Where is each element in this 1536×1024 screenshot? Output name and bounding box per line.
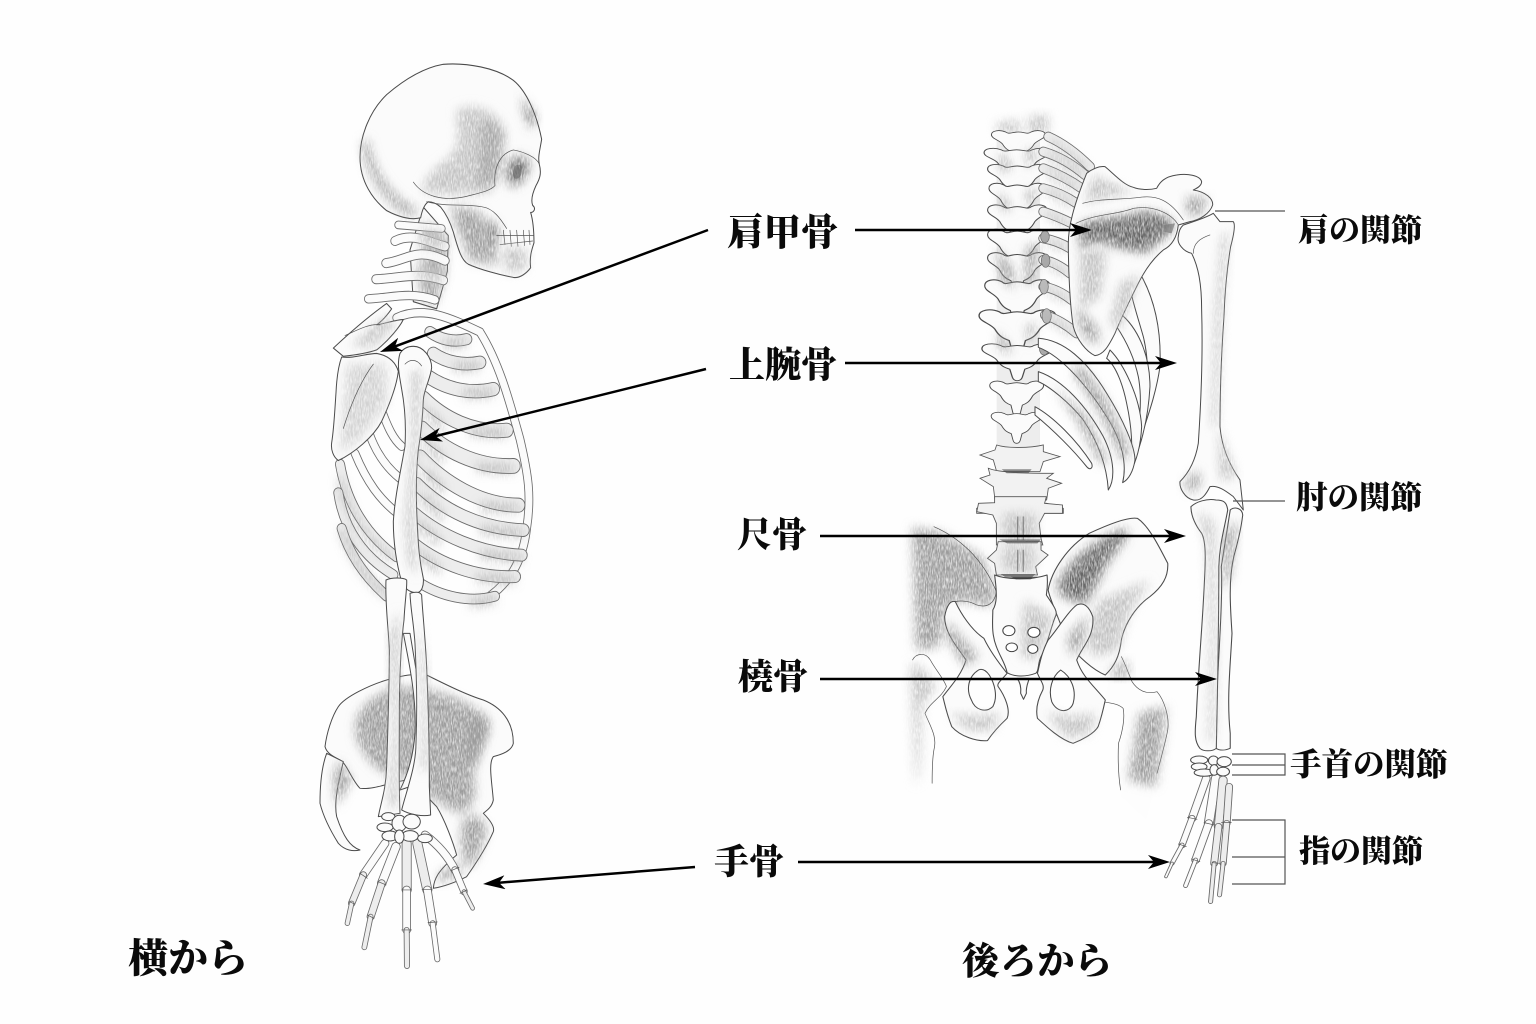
wrist joint bracket bbox=[1232, 754, 1285, 775]
forearm bones bbox=[378, 578, 431, 817]
arrow: hand, side view bbox=[499, 867, 695, 883]
pelvis bbox=[320, 674, 513, 888]
lumbar vertebrae bbox=[977, 497, 1062, 579]
arrow: radius bbox=[820, 678, 1201, 680]
pelvis, forearm and hand bbox=[911, 497, 1243, 902]
arrow: scapula, side view bbox=[395, 230, 708, 346]
label: ulna: 尺骨 bbox=[737, 516, 807, 555]
illustration: skeleton from the back bbox=[911, 115, 1243, 902]
label: shoulder joint: 肩の関節 bbox=[1298, 213, 1422, 248]
label: elbow joint: 肘の関節 bbox=[1296, 480, 1422, 515]
shoulder leader line bbox=[1215, 210, 1285, 212]
neck vertebrae bbox=[368, 207, 448, 309]
label: humerus: 上腕骨 bbox=[729, 345, 837, 385]
spine, ribs, scapula and humerus bbox=[977, 115, 1243, 513]
left hip socket ring bbox=[943, 601, 1008, 741]
right hip socket ring bbox=[1037, 604, 1128, 743]
arrow: hand, back view bbox=[798, 861, 1154, 863]
arrow: scapula, back view bbox=[855, 229, 1076, 231]
caption: from the back: 後ろから bbox=[962, 941, 1112, 983]
elbow leader line bbox=[1233, 500, 1285, 502]
skull bbox=[360, 64, 542, 278]
label: radius: 橈骨 bbox=[738, 658, 808, 697]
sacrum bbox=[993, 575, 1056, 699]
arrow: humerus, side view bbox=[436, 369, 706, 436]
hand bones bbox=[347, 813, 473, 966]
finger joint bracket bbox=[1232, 820, 1285, 884]
label: wrist joint: 手首の関節 bbox=[1290, 747, 1448, 782]
arrow: ulna bbox=[820, 535, 1170, 537]
lower body: forearm, pelvis and hand bbox=[320, 578, 513, 966]
forearm bones bbox=[1191, 500, 1243, 751]
caption: from the side: 横から bbox=[128, 936, 248, 981]
upper body: skull, neck, ribs, scapula and humerus bbox=[331, 64, 542, 603]
scapula and acromion bbox=[1068, 167, 1213, 356]
wrist and hand bones bbox=[1166, 756, 1231, 902]
label: scapula: 肩甲骨 bbox=[727, 211, 838, 254]
femurs bbox=[911, 654, 1168, 820]
long lower ribs bbox=[1035, 273, 1160, 490]
label: hand bones: 手骨 bbox=[714, 843, 784, 882]
label: finger joints: 指の関節 bbox=[1299, 834, 1423, 869]
short upper ribs bbox=[1039, 137, 1090, 355]
spine column bbox=[977, 115, 1063, 513]
illustration: skeleton from the side bbox=[320, 64, 542, 966]
left and right ilium bbox=[912, 518, 1168, 675]
rib cage bbox=[338, 313, 529, 603]
humerus bbox=[393, 346, 432, 593]
clavicle and acromion bbox=[333, 303, 403, 356]
scapula bbox=[331, 353, 398, 461]
humerus bbox=[1178, 213, 1243, 510]
arrow: humerus, back view bbox=[845, 362, 1161, 364]
